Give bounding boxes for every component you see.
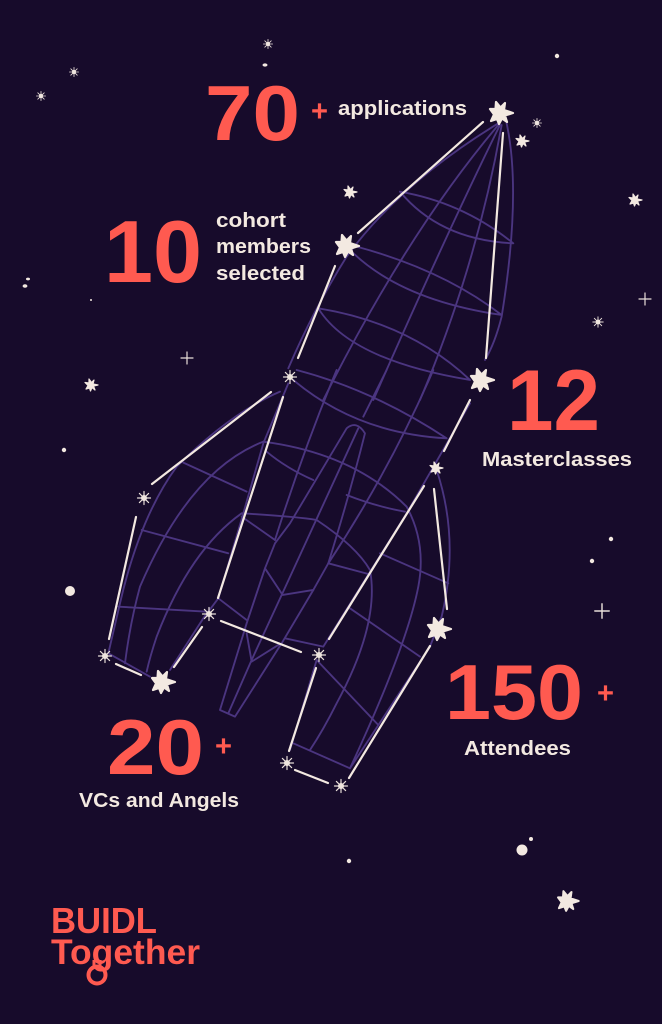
logo: BUIDL Together: Together	[51, 933, 200, 972]
logo: BUIDL Together: BUIDL	[51, 900, 157, 941]
logo: BUIDL Together	[51, 900, 200, 984]
stat: 10 cohort members selected	[104, 202, 311, 301]
rocket nose and upper hull wireframe	[288, 123, 513, 400]
centre fin	[220, 425, 365, 717]
rocket wireframe	[108, 123, 513, 768]
stat: 10 cohort members selected: cohort	[216, 210, 286, 232]
stat: 10 cohort members selected: selected	[216, 263, 305, 285]
right fin	[263, 442, 421, 768]
stat: 20+ VCs and Angels: 20	[107, 703, 204, 791]
stat: 150+ Attendees: +	[597, 677, 614, 710]
rocket body, fins and centre fin wireframe	[108, 370, 470, 768]
stat: 20+ VCs and Angels: +	[215, 730, 232, 763]
constellation lines	[109, 122, 503, 783]
stat: 70+ applications: 70	[205, 69, 300, 157]
stat: 150+ Attendees: Attendees	[464, 738, 571, 760]
stat: 150+ Attendees	[445, 648, 614, 760]
left fin	[108, 392, 280, 677]
stat: 20+ VCs and Angels	[79, 703, 239, 812]
stat: 12 Masterclasses: Masterclasses	[482, 449, 632, 471]
stat: 150+ Attendees: 150	[445, 648, 583, 736]
stat: 70+ applications	[205, 69, 467, 157]
stat: 70+ applications: +	[311, 95, 328, 128]
stat: 20+ VCs and Angels: VCs and Angels	[79, 790, 239, 812]
stat: 10 cohort members selected: members	[216, 236, 311, 258]
stat: 12 Masterclasses: 12	[507, 353, 600, 449]
stat: 12 Masterclasses	[482, 353, 632, 471]
stat: 10 cohort members selected: 10	[104, 202, 202, 301]
stat: 70+ applications: applications	[338, 98, 467, 120]
